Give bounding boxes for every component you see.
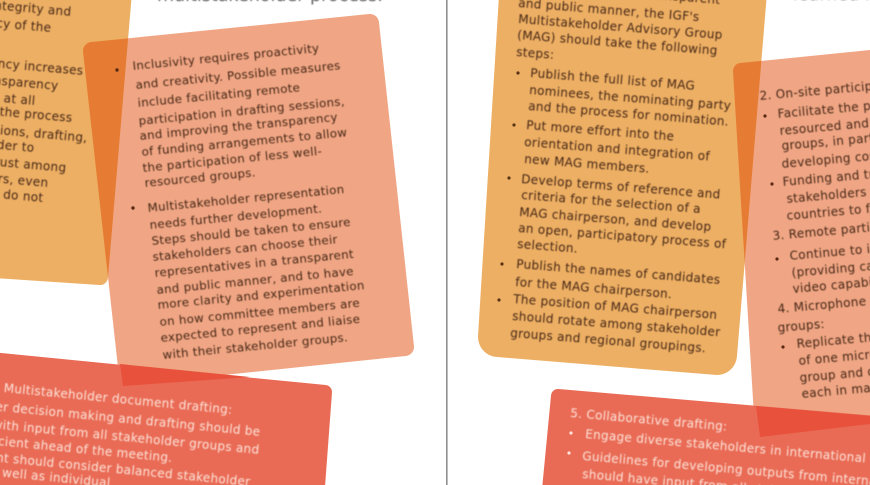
text block: right orange note: Publish the names of candidates (516, 257, 721, 287)
text block: left salmon note: expected to represent and liaise (160, 312, 361, 345)
text block: right orange note: MAG chairperson, and develop (519, 205, 712, 234)
text block: right orange note: an open, participatory process of (518, 221, 727, 251)
panel: left red note (0, 358, 325, 485)
text block: right red note: Engage diverse stakeholders in international (585, 427, 867, 466)
text block: right orange note: groups and regional groupings. (510, 326, 707, 355)
bullet: rotation (497, 298, 501, 302)
text block: right orange note: selection. (517, 237, 578, 256)
panel: left orange note (0, 0, 125, 277)
bullet: continue (775, 257, 779, 261)
text block: left salmon note: resourced groups. (144, 165, 256, 190)
text block: right orange note: (MAG) should take the following (517, 28, 718, 58)
text block: right orange note: and the process for nomination. (528, 99, 729, 129)
panel: right red note (548, 396, 870, 485)
text block: left salmon note: and public manner, and to have (156, 264, 354, 297)
overlap: salmon and red, right (756, 406, 870, 437)
bullet: inclusivity (115, 68, 119, 72)
bullet: facilitate (763, 114, 767, 118)
text block: right orange note: for the MAG chairperson. (515, 275, 673, 301)
text block: left salmon note: include facilitating remote (137, 80, 301, 110)
panel: right orange note (498, 0, 748, 355)
text block: right orange note: Publish the full list of MAG (530, 66, 696, 93)
text block: right orange note: The position of MAG chairperson (512, 292, 718, 322)
divider between pages (446, 0, 448, 485)
text block: left salmon note: with their stakeholder groups. (162, 330, 349, 362)
text block: right orange note: criteria for the selection of a (521, 188, 701, 216)
text block: right orange note: Put more effort into the (526, 118, 675, 144)
bullet: orientation (512, 123, 516, 127)
text block: left salmon note: and improving the transparency (139, 110, 338, 143)
text block: right red note (567, 406, 870, 485)
bullet: engage (569, 431, 573, 435)
text block: right orange note: Develop terms of reference and (521, 172, 721, 202)
text block: right orange note: Multistakeholder Advisory Group (518, 12, 723, 42)
text block: left red note (0, 379, 261, 485)
bullet: representation (131, 206, 135, 210)
bullet: funding (770, 182, 774, 186)
text block: left orange note fragments: at all (3, 91, 36, 108)
text block: right salmon note (759, 76, 870, 401)
overlap: salmon and red, left (120, 364, 250, 386)
bullet: guidelines (567, 451, 571, 455)
text block: right orange note: orientation and integration of (524, 135, 711, 164)
text block: right orange note: nominees, the nominating party (529, 83, 732, 113)
bullet: replicate (781, 345, 785, 349)
bullet: terms of reference (507, 176, 511, 180)
bullet: publish candidates (500, 262, 504, 266)
text block: left salmon note: stakeholders can choose their (152, 232, 338, 264)
text block: left orange note fragments (0, 0, 88, 205)
bullet: publish list (516, 71, 520, 75)
text block: left salmon note: Inclusivity requires proactivity (132, 41, 320, 73)
text block: left salmon note: needs further development. (149, 201, 323, 232)
text block: left salmon note: participation in drafting sessions, (138, 94, 345, 128)
panel: right salmon note (741, 55, 870, 432)
text block: right salmon note: groups: (777, 317, 825, 335)
text block: right orange note: new MAG members. (524, 152, 650, 176)
text block: right orange note: should rotate among stakeholder (512, 309, 721, 339)
text block: right orange note: steps: (516, 45, 555, 62)
text block: left salmon note (115, 41, 365, 362)
text block: right orange note (496, 0, 732, 355)
text block: left salmon note: Steps should be taken to ensure (151, 215, 351, 248)
text block: left salmon note: and creativity. Possible measures (135, 58, 341, 92)
text block: left salmon note: of funding arrangements to allow (141, 125, 348, 159)
text block: right red note: 5. Collaborative drafting: (570, 406, 728, 434)
text block: left salmon note: the participation of less well- (142, 144, 323, 175)
text block: left salmon note: on how committee members are (159, 296, 361, 329)
text block: left salmon note: more clarity and experimentation (157, 278, 365, 312)
text block: left salmon note: Multistakeholder representation (147, 182, 345, 215)
panel: left salmon note (92, 23, 405, 376)
text block: left salmon note: representatives in a transparent (154, 247, 354, 280)
